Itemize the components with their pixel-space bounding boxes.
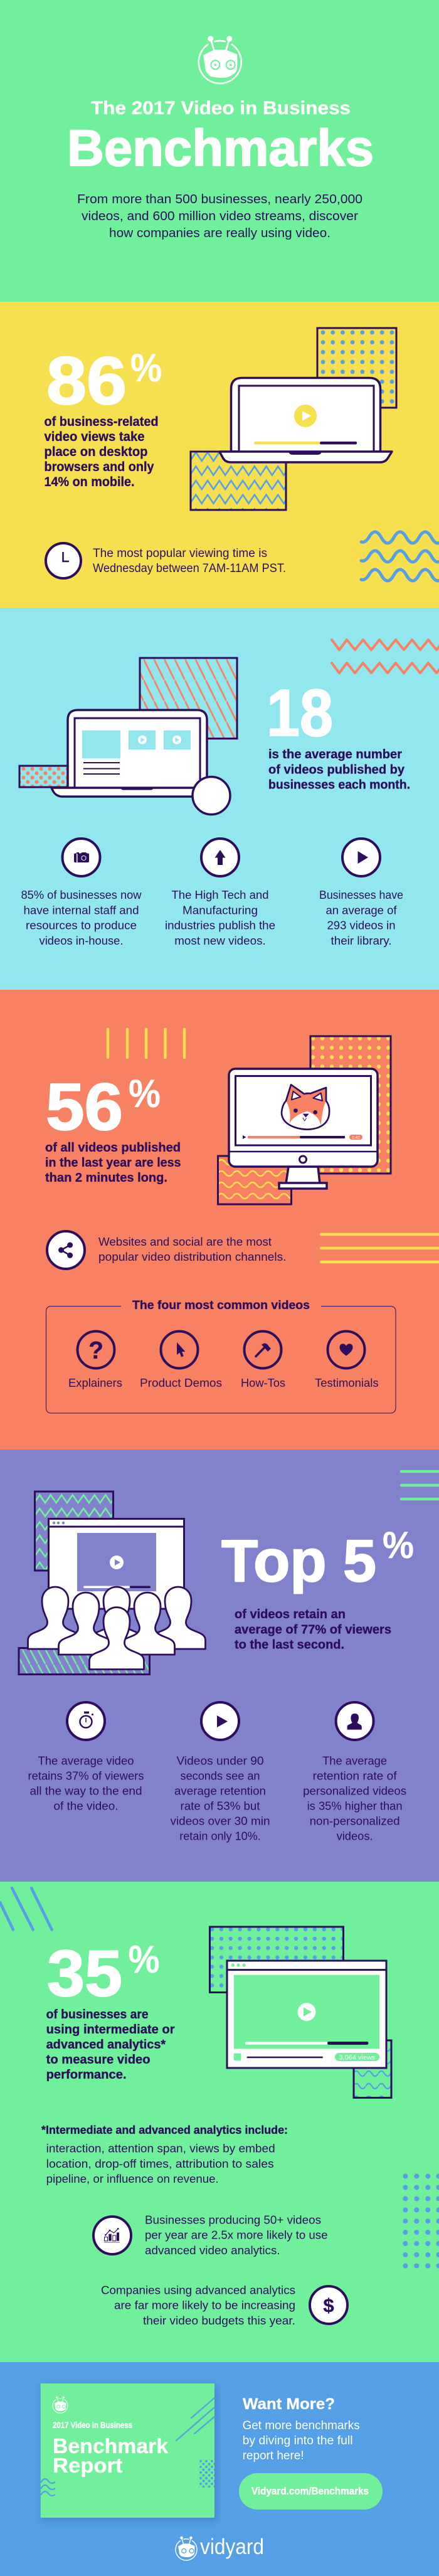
text: video budgets: Companies using advanced analytics [101, 2284, 295, 2297]
text: average retention: retains 37% of viewers [28, 1770, 144, 1783]
stat: top 5%: Top 5 [221, 1528, 376, 1594]
text: average retention [28, 1754, 144, 1813]
stat description: place on desktop [44, 445, 148, 459]
text: length retention: Videos under 90 [177, 1754, 263, 1767]
cover title: 2017 Video in Business [53, 2420, 132, 2430]
text: length retention: average retention [174, 1785, 266, 1798]
stat description [45, 1141, 181, 1185]
illustration: browser video player: 3,064 views [339, 2055, 375, 2061]
decoration: dot grid [403, 2174, 439, 2268]
icon: up arrow [201, 839, 239, 876]
text: industries: Manufacturing [182, 903, 258, 917]
stat description: than 2 minutes long. [45, 1171, 167, 1185]
icon: dollar [310, 2286, 347, 2324]
cover title: Benchmark [53, 2434, 169, 2457]
icon: person [336, 1702, 374, 1740]
title: The 2017 Video in Business [91, 98, 351, 119]
text: library: 293 videos in [327, 919, 395, 932]
icon: hammer [245, 1331, 281, 1369]
text: industries: most new videos. [174, 934, 266, 947]
stat: 35%: 35 [47, 1937, 122, 2010]
button: report link [239, 2473, 383, 2510]
icon: fox [282, 1084, 329, 1130]
stat description [268, 748, 410, 792]
footnote text [46, 2142, 275, 2185]
panel: desktop views [0, 302, 439, 608]
text: average retention: of the video. [54, 1800, 118, 1813]
footnote text: pipeline, or influence on revenue. [46, 2172, 219, 2185]
text: length retention: videos over 30 min [171, 1815, 270, 1828]
text: 50+ videos [145, 2213, 327, 2257]
intro text: From more than 500 businesses, nearly 250,000 [77, 193, 362, 206]
text: video budgets: are far more likely to be increasing [114, 2299, 295, 2312]
stat description: of videos retain an [235, 1608, 346, 1621]
stat description: to the last second. [235, 1638, 344, 1652]
text: in-house video: videos in-house. [39, 934, 123, 947]
stat description: using intermediate or [46, 2023, 175, 2037]
text: 50+ videos: per year are 2.5x more likely to use [145, 2229, 327, 2242]
text: length retention: retain only 10%. [179, 1830, 261, 1843]
stat description: browsers and only [44, 460, 154, 474]
viewing time text: Wednesday between 7AM-11AM PST. [93, 561, 286, 575]
icon: footer robot [176, 2536, 197, 2560]
vidyard footer logo [176, 2535, 264, 2560]
footnote heading: *Intermediate and advanced analytics include: [41, 2124, 288, 2136]
call to action text [243, 2419, 360, 2462]
stat description [46, 2008, 175, 2082]
text: video budgets: their video budgets this year. [143, 2314, 295, 2327]
button: report link: Vidyard.com/Benchmarks [251, 2486, 369, 2497]
label: product demos: Product Demos [140, 1376, 222, 1389]
panel: viewer retention [0, 1450, 439, 1882]
text: in-house video [21, 888, 142, 947]
intro text: videos, and 600 million video streams, discover [82, 209, 358, 223]
illustration: laptop library [19, 658, 237, 814]
icon: dollar: $ [323, 2294, 334, 2316]
stat: 35% [47, 1937, 159, 2010]
decoration: diagonal lines [0, 1888, 52, 1929]
icon: play [342, 839, 380, 876]
heading: The four most common videos [132, 1299, 310, 1312]
panel: videos published [0, 608, 439, 990]
stat description: in the last year are less [45, 1156, 181, 1170]
label: testimonials: Testimonials [315, 1376, 379, 1389]
text: personalized [303, 1754, 406, 1843]
text: average retention: The average video [38, 1754, 134, 1767]
stat description: is the average number [268, 748, 402, 761]
text: average retention: all the way to the end [30, 1785, 142, 1798]
stat: 35%: % [128, 1938, 159, 1981]
icon: cursor [161, 1331, 198, 1369]
stat description: performance. [46, 2068, 127, 2082]
text: library: an average of [326, 903, 397, 917]
text: in-house video: resources to produce [26, 919, 137, 932]
text: library: their library. [331, 934, 391, 947]
intro text [77, 193, 362, 240]
distribution text [98, 1235, 286, 1263]
call to action text: report here! [243, 2449, 304, 2462]
stat: 86%: 86 [46, 342, 127, 418]
stat description: of businesses are [46, 2008, 149, 2022]
illustration: browser video player [209, 1927, 391, 2097]
stat description: of videos published by [268, 763, 405, 777]
panel: four most common videos [46, 1299, 396, 1413]
text: library [319, 888, 403, 947]
footnote text: location, drop-off times, attribution to sales [46, 2157, 274, 2170]
stat description: average of 77% of viewers [235, 1623, 391, 1637]
call to action text: Get more benchmarks [243, 2419, 360, 2432]
text: library: Businesses have [319, 888, 403, 901]
text: length retention: rate of 53% but [181, 1800, 260, 1813]
icon: clock [46, 543, 81, 578]
text: personalized: retention rate of [313, 1770, 398, 1783]
label: explainers: Explainers [68, 1376, 122, 1389]
heading: want more: Want More? [243, 2395, 335, 2413]
icon: vidyard robot logo [199, 36, 241, 83]
stat: top 5%: % [383, 1524, 414, 1566]
illustration: monitor with fox video [218, 1036, 391, 1204]
icon: heart [327, 1331, 365, 1369]
panel: video length [0, 990, 439, 1450]
stat description: 14% on mobile. [44, 475, 134, 489]
distribution text: popular video distribution channels. [98, 1250, 286, 1263]
icon: bar chart [93, 2217, 131, 2254]
stat description: video views take [44, 430, 144, 444]
text: personalized: non-personalized [310, 1815, 400, 1828]
illustration: monitor with fox video: 1:42 [352, 1135, 360, 1140]
report cover [41, 2383, 217, 2521]
text: length retention: seconds see an [181, 1770, 260, 1783]
panel: analytics [0, 1882, 439, 2362]
text: video budgets [101, 2284, 295, 2327]
panel: want more call to action [0, 2362, 439, 2576]
decoration: zigzags [332, 640, 439, 673]
text: personalized: is 35% higher than [307, 1800, 403, 1813]
text: industries [165, 888, 275, 947]
text: personalized: The average [322, 1754, 387, 1767]
viewing time text [93, 546, 286, 575]
stat: 56%: 56 [46, 1070, 123, 1144]
text: personalized: videos. [337, 1830, 373, 1843]
wordmark: vidyard [200, 2535, 264, 2559]
cover title: Report [53, 2454, 123, 2477]
decoration: green lines [401, 1471, 439, 1499]
viewing time text: The most popular viewing time is [93, 546, 267, 560]
illustration: laptop with video [191, 328, 396, 510]
stat description [44, 415, 158, 489]
stat description [235, 1608, 391, 1652]
illustration: audience watching video [19, 1492, 206, 1675]
decoration: horizontal lines [321, 1234, 439, 1262]
cover title [53, 2420, 169, 2477]
stat: 56% [46, 1070, 161, 1144]
stat description: to measure video [46, 2053, 151, 2067]
stat: 56%: % [129, 1072, 161, 1116]
text: personalized: personalized videos [303, 1785, 406, 1798]
icon: share [47, 1231, 85, 1269]
text: 50+ videos: Businesses producing 50+ videos [145, 2213, 321, 2227]
footnote text: interaction, attention span, views by embed [46, 2142, 275, 2155]
icon: play [201, 1702, 239, 1740]
title: Benchmarks [67, 120, 374, 177]
text: industries: The High Tech and [172, 888, 268, 901]
stat: 18: 18 [267, 676, 333, 750]
text: in-house video: have internal staff and [24, 903, 139, 917]
distribution text: Websites and social are the most [98, 1235, 272, 1248]
icon: camera [63, 839, 100, 876]
stat description: advanced analytics* [46, 2038, 166, 2052]
intro text: how companies are really using video. [109, 226, 331, 240]
label: how-tos: How-Tos [241, 1376, 285, 1389]
text: length retention [171, 1754, 270, 1843]
panel: hero [0, 0, 439, 302]
stat: 86%: % [130, 346, 162, 390]
stat description: businesses each month. [268, 778, 410, 792]
cover decoration [41, 2398, 214, 2496]
icon: stopwatch [67, 1702, 105, 1740]
stat: 86% [46, 342, 162, 418]
stat description: of all videos published [45, 1141, 181, 1155]
decoration: waves [361, 532, 439, 581]
icon: question mark: ? [88, 1337, 103, 1364]
icon: mini logo [53, 2397, 68, 2413]
icon: question mark [78, 1331, 114, 1369]
call to action text: by diving into the full [243, 2434, 353, 2447]
text: 50+ videos: advanced video analytics. [145, 2244, 280, 2257]
text: in-house video: 85% of businesses now [21, 888, 142, 901]
stat description: of business-related [44, 415, 158, 429]
text: industries: industries publish the [165, 919, 275, 932]
decoration: vertical bars [108, 1029, 184, 1057]
